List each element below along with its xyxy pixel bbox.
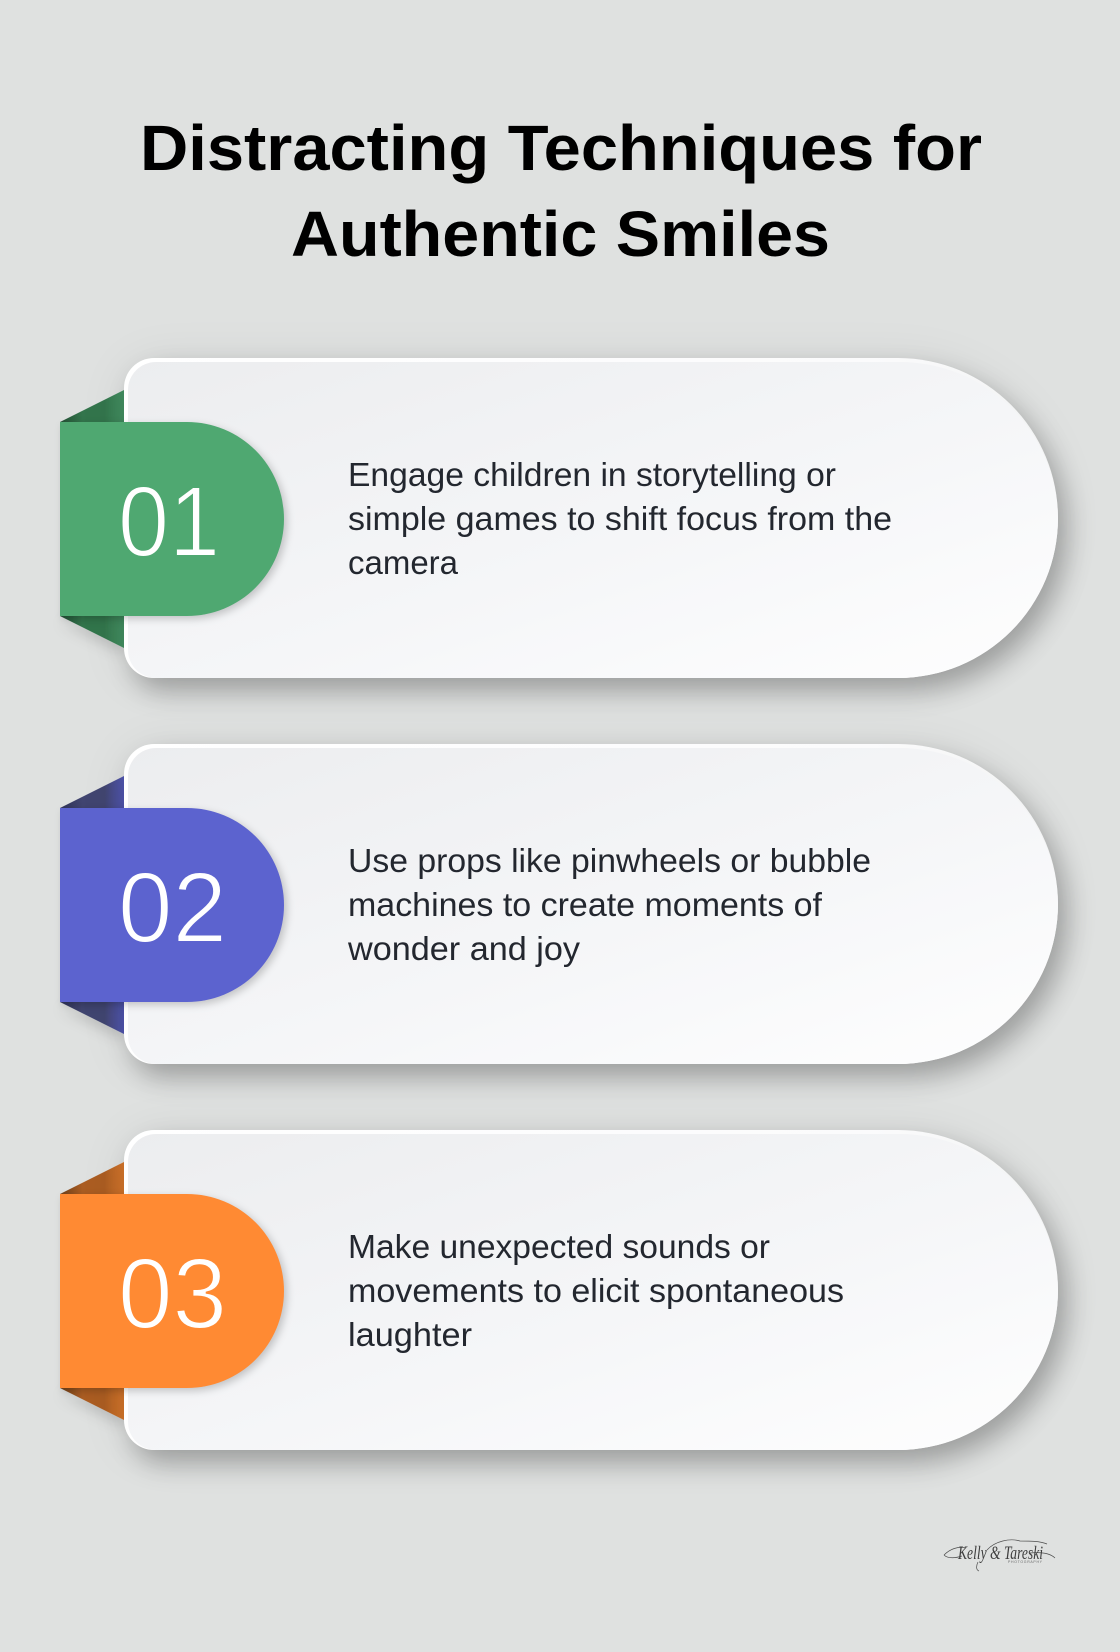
ribbon fold: step 02 top [60,776,124,808]
title: Authentic Smiles [291,198,830,270]
description: step 02 [347,842,871,967]
number tab: step 01 [60,422,284,616]
description: step 01: simple games to shift focus from the [348,500,892,537]
description: step 03: movements to elicit spontaneous [348,1272,844,1309]
logo: photographer signature [944,1540,1055,1571]
ribbon fold: step 01 bottom [60,616,124,648]
logo: photographer signature: Kelly & Tareski [957,1543,1043,1564]
description: step 03: Make unexpected sounds or [348,1228,770,1265]
description: step 01: Engage children in storytelling or [348,456,836,493]
description: step 03 [348,1228,844,1353]
number: 01: 01 [118,466,220,578]
description: step 02: wonder and joy [347,930,581,967]
description: step 02: machines to create moments of [348,886,823,923]
number: 02: 02 [118,852,227,964]
panel: step 03 [60,1130,1058,1450]
panel: step 02 [60,744,1058,1064]
number: 03: 03 [118,1238,227,1350]
number tab: step 02 [60,808,284,1002]
ribbon fold: step 02 bottom [60,1002,124,1034]
card: step 03 [124,1130,1058,1450]
ribbon fold: step 03 top [60,1162,124,1194]
description: step 01: camera [348,544,459,581]
panel: step 01 [60,358,1058,678]
title: Distracting Techniques for [140,112,982,184]
card: step 02 [124,744,1058,1064]
description: step 02: Use props like pinwheels or bubble [348,842,871,879]
number tab: step 03 [60,1194,284,1388]
card: step 01 [124,358,1058,678]
title [140,112,982,270]
ribbon fold: step 03 bottom [60,1388,124,1420]
ribbon fold: step 01 top [60,390,124,422]
description: step 03: laughter [348,1316,472,1353]
description: step 01 [348,456,892,581]
logo: photographer signature: PHOTOGRAPHY [1008,1560,1043,1564]
